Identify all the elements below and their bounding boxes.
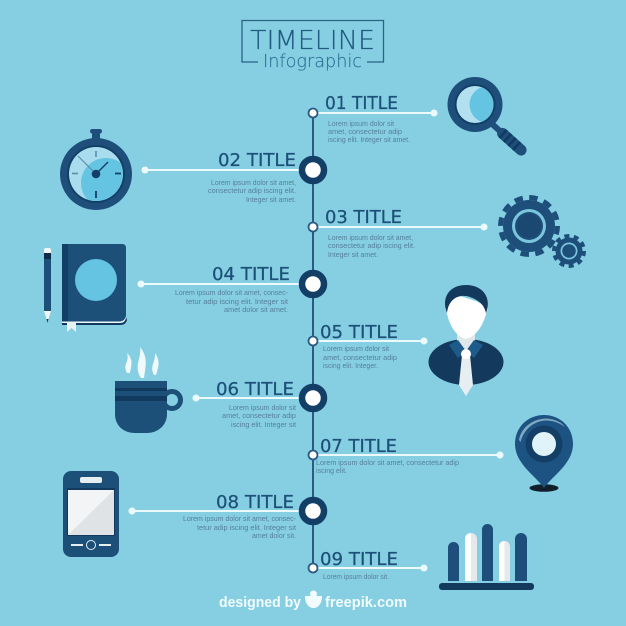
timeline spine: [312, 113, 314, 568]
item 04: Lorem ipsum dolor sit amet, consec-: [175, 288, 289, 297]
item 09: Lorem ipsum dolor sit.: [323, 572, 389, 581]
item 04: 04 TITLE: [212, 264, 290, 285]
item 05: 05 TITLE: [320, 322, 398, 343]
item 02: Integer sit amet.: [246, 195, 296, 204]
item 05: amet, consectetur adip: [323, 353, 397, 362]
title: TIMELINE: [250, 26, 375, 56]
icon: gears: [500, 198, 584, 266]
freepik credit: designed by: [219, 594, 302, 611]
item 07: [308, 436, 504, 475]
item 06: iscing elit. Integer sit: [231, 420, 296, 429]
item 09: 09 TITLE: [320, 549, 398, 570]
icon: magnifying glass: [448, 77, 529, 158]
icon: businessman: [428, 285, 504, 396]
freepik credit: [219, 590, 407, 611]
item 05: iscing elit. Integer.: [323, 361, 378, 370]
item 03: consectetur adip iscing elit.: [328, 241, 415, 250]
icon: stopwatch: [60, 129, 132, 210]
item 02: Lorem ipsum dolor sit amet,: [211, 178, 296, 187]
item 01: 01 TITLE: [325, 93, 398, 114]
item 07: 07 TITLE: [320, 436, 397, 457]
icon: bar chart: [439, 524, 534, 590]
item 08: [128, 492, 324, 540]
freepik credit: freepik.com: [325, 594, 407, 611]
item 03: 03 TITLE: [325, 207, 402, 228]
item 08: tetur adip iscing elit. Integer sit: [197, 523, 296, 532]
icon: coffee cup: [115, 347, 180, 433]
item 07: Lorem ipsum dolor sit amet, consectetur adip: [316, 458, 459, 467]
title: Infographic: [263, 51, 362, 72]
item 01: [308, 93, 438, 144]
item 08: 08 TITLE: [216, 492, 294, 513]
item 02: [142, 150, 324, 204]
icon: smartphone: [63, 471, 119, 557]
item 06: [192, 379, 324, 429]
item 04: [138, 264, 324, 314]
item 07: iscing elit.: [316, 466, 347, 475]
item 08: Lorem ipsum dolor sit amet, consec-: [183, 514, 297, 523]
item 06: amet, consectetur adip: [222, 411, 296, 420]
item 02: 02 TITLE: [218, 150, 296, 171]
item 04: amet dolor sit amet.: [224, 305, 288, 314]
item 02: consectetur adip iscing elit.: [208, 186, 296, 195]
item 01: Lorem ipsum dolor sit: [328, 119, 394, 128]
item 09: [308, 549, 428, 581]
icon: notebook and pencil: [44, 244, 127, 332]
item 03: Integer sit amet.: [328, 250, 378, 259]
item 05: [308, 322, 428, 370]
item 03: [308, 207, 488, 259]
item 05: Lorem ipsum dolor sit: [323, 344, 389, 353]
item 06: Lorem ipsum dolor sit: [229, 403, 296, 412]
icon: map pin: [515, 415, 573, 492]
item 01: amet, consectetur adip: [328, 127, 402, 136]
item 06: 06 TITLE: [216, 379, 294, 400]
item 08: amet dolor sit.: [252, 531, 296, 540]
item 03: Lorem ipsum dolor sit amet,: [328, 233, 413, 242]
item 04: tetur adip iscing elit. Integer sit: [186, 297, 288, 306]
title: [242, 20, 384, 72]
item 01: iscing elit. Integer sit amet.: [328, 135, 410, 144]
